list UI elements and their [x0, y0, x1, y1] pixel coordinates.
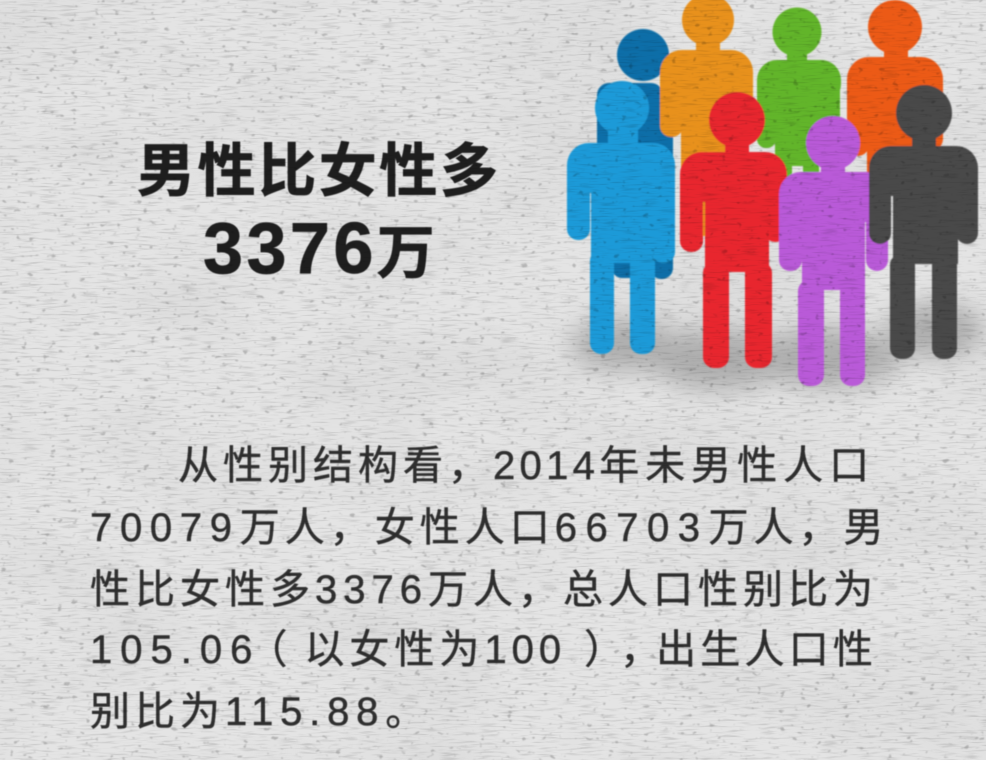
- body line 3: 性比女性多3376万人，总人口性别比为: [90, 568, 878, 612]
- person: dark grey: [869, 85, 978, 359]
- ground shadow: [570, 302, 983, 390]
- body line 4: 105.06（以女性为100 ），出生人口性: [90, 628, 877, 672]
- person: purple: [779, 116, 888, 386]
- body line 1: 从性别结构看，2014年未男性人口: [178, 444, 875, 488]
- person: orange: [660, 0, 753, 236]
- person: orange-red: [847, 0, 943, 186]
- heading line 1: 男性比女性多: [137, 139, 501, 204]
- person: red: [680, 92, 787, 368]
- heading line 2: 3376万: 3376万: [203, 209, 438, 289]
- person: bright blue: [567, 81, 675, 354]
- body line 2: 70079万人，女性人口66703万人，男: [90, 506, 888, 550]
- title: main heading: [137, 139, 501, 289]
- text block: body paragraph: [90, 444, 888, 734]
- body line 5: 别比为115.88。: [90, 690, 430, 734]
- person: dark blue: [597, 29, 673, 279]
- person: green: [757, 8, 841, 182]
